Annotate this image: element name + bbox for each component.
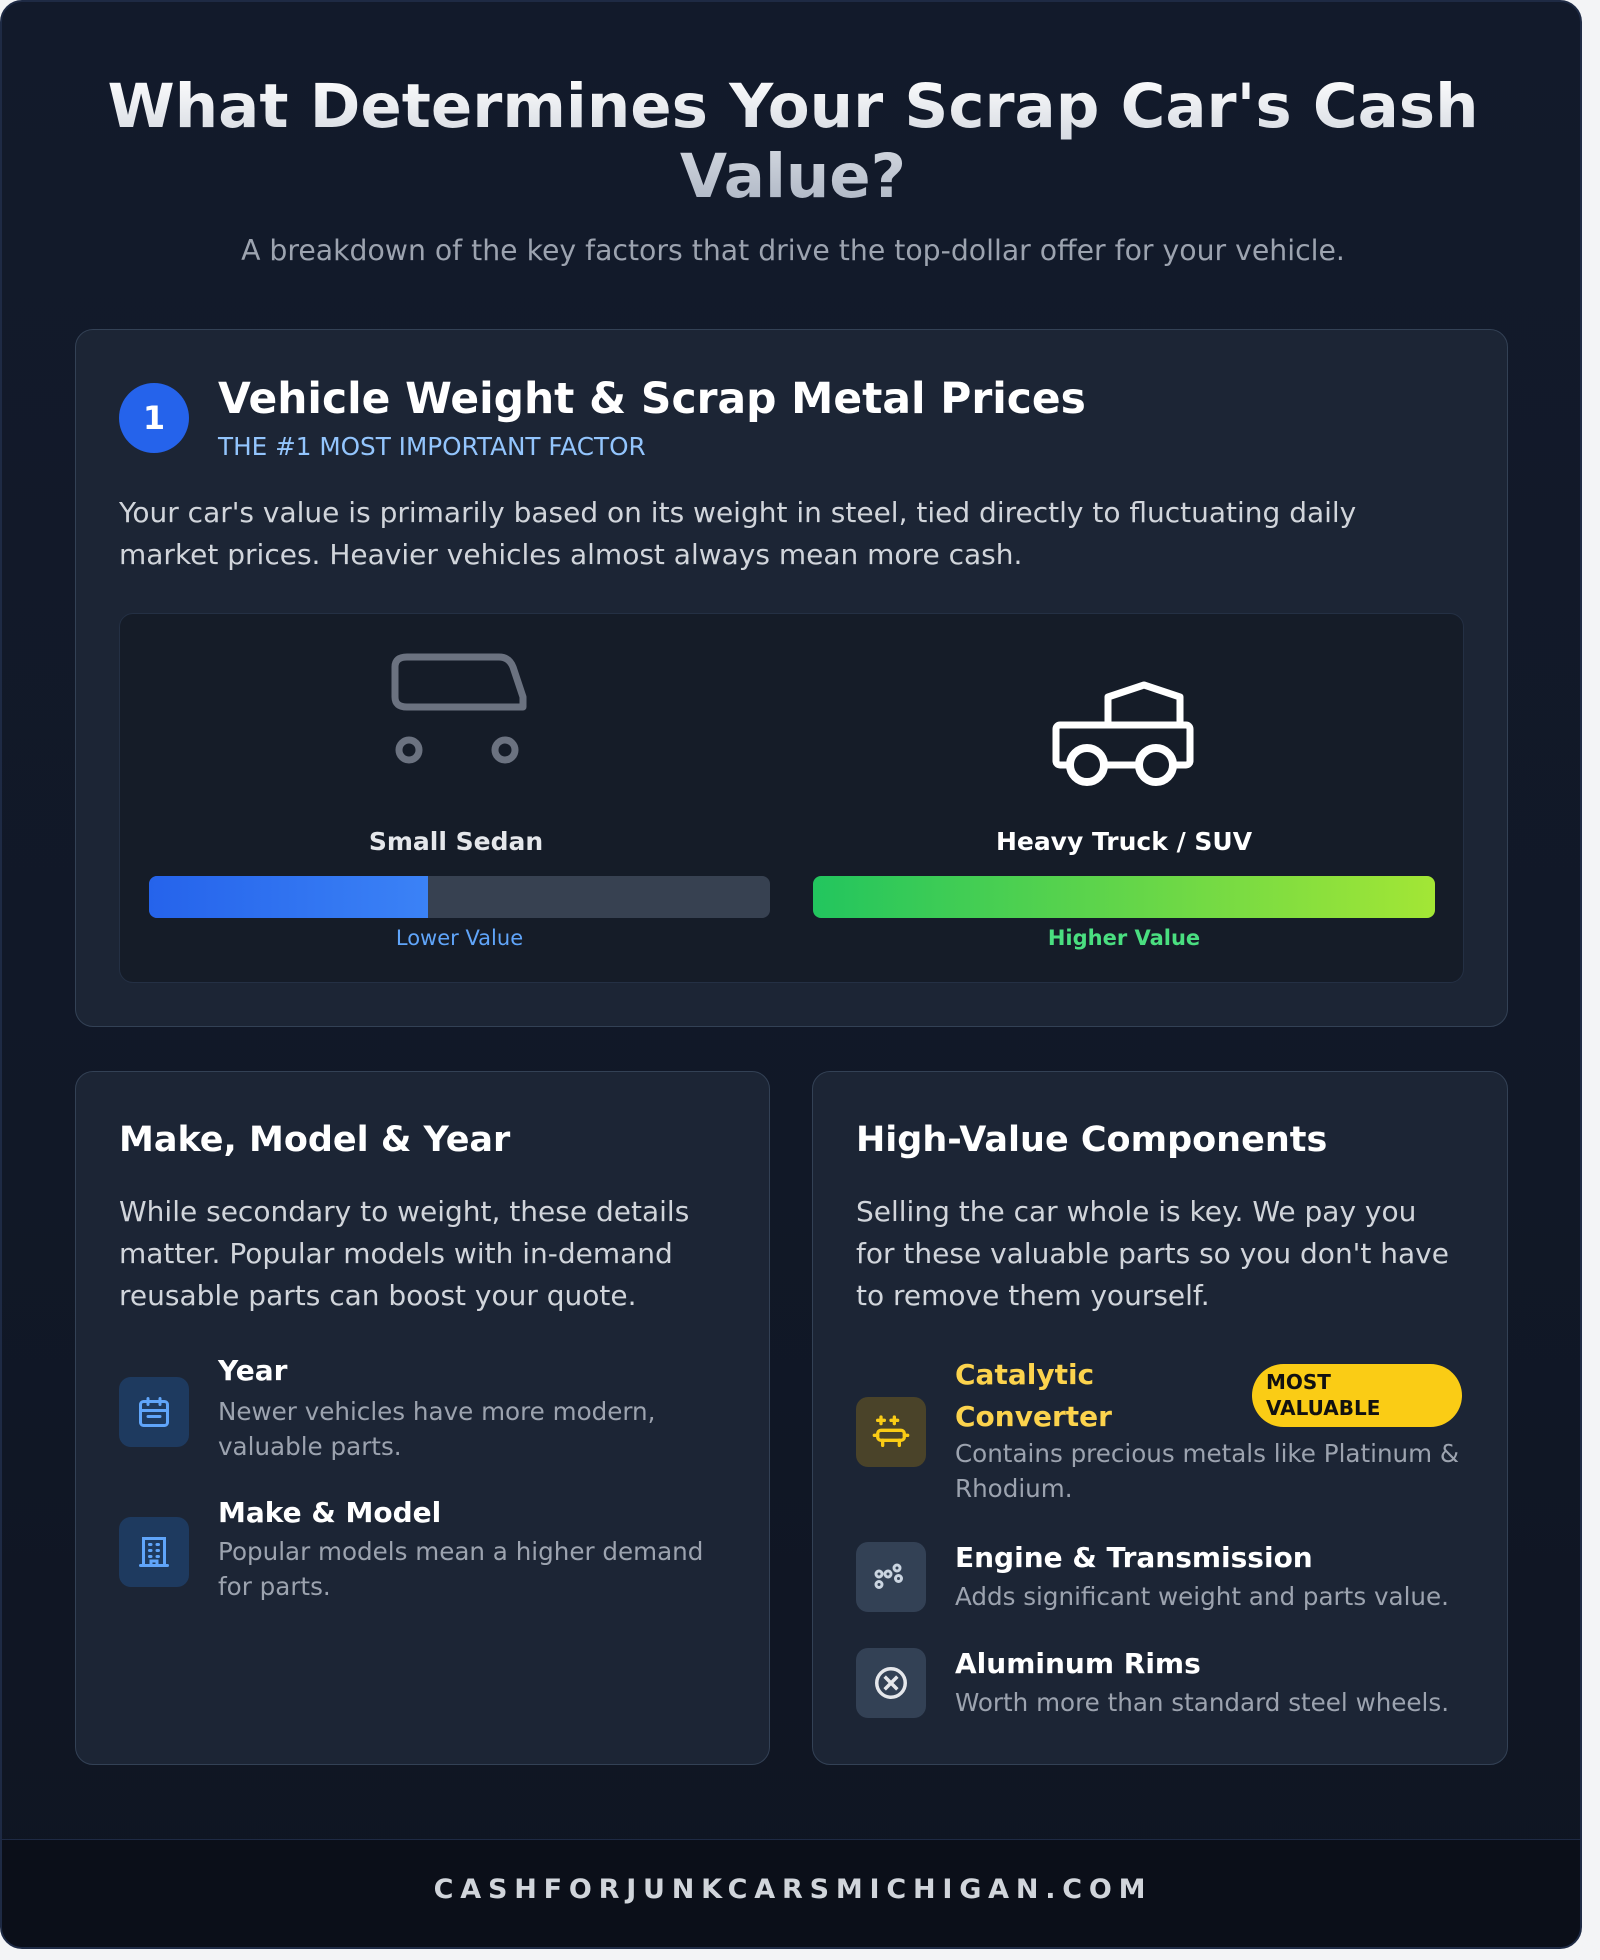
description: While secondary to weight, these details xyxy=(119,1195,689,1228)
heading: Make, Model & Year xyxy=(119,1120,510,1160)
badge number 1 xyxy=(119,383,189,453)
badge: most valuable: MOST xyxy=(1266,1370,1331,1394)
item: make & model: Make & Model xyxy=(218,1496,441,1529)
icon: heavy truck xyxy=(1052,682,1194,786)
description: market prices. Heavier vehicles almost always mean more cash. xyxy=(119,538,1022,571)
description: to remove them yourself. xyxy=(856,1279,1210,1312)
item: year: Year xyxy=(218,1354,287,1387)
label: small sedan: Small Sedan xyxy=(369,827,543,856)
icon: wheel xyxy=(856,1648,926,1718)
description: Your car's value is primarily based on its weight in steel, tied directly to fluctuating daily xyxy=(119,496,1356,529)
item: rims xyxy=(856,1647,1449,1718)
badge: most valuable: VALUABLE xyxy=(1266,1396,1380,1420)
description: reusable parts can boost your quote. xyxy=(119,1279,637,1312)
icon: small sedan xyxy=(392,654,526,764)
icon: converter xyxy=(856,1397,926,1467)
item: engine: Engine & Transmission xyxy=(955,1541,1313,1574)
item: rims: Worth more than standard steel wheels. xyxy=(955,1688,1449,1717)
description: for these valuable parts so you don't have xyxy=(856,1237,1449,1270)
item: catalytic converter xyxy=(856,1358,1462,1503)
description: matter. Popular models with in-demand xyxy=(119,1237,673,1270)
item: make & model: for parts. xyxy=(218,1572,331,1601)
item: engine: Adds significant weight and parts value. xyxy=(955,1582,1449,1611)
subheading: THE #1 MOST IMPORTANT FACTOR xyxy=(218,432,646,461)
icon: building xyxy=(119,1517,189,1587)
bar: higher value xyxy=(813,876,1435,918)
item: catalytic converter: Rhodium. xyxy=(955,1474,1073,1503)
item: year: Newer vehicles have more modern, xyxy=(218,1397,655,1426)
item: catalytic converter: Contains precious metals like Platinum & xyxy=(955,1439,1459,1468)
label: lower value: Lower Value xyxy=(396,926,523,950)
description xyxy=(119,496,1356,571)
bar: lower value xyxy=(149,876,770,918)
panel: vehicle weight xyxy=(75,329,1508,1027)
item: catalytic converter: Converter xyxy=(955,1400,1112,1433)
heading: High-Value Components xyxy=(856,1120,1327,1160)
comparison box xyxy=(119,613,1464,983)
item: make & model xyxy=(119,1496,703,1601)
item: engine xyxy=(856,1541,1449,1612)
badge number 1: 1 xyxy=(143,399,165,437)
item: rims: Aluminum Rims xyxy=(955,1647,1201,1680)
label: higher value: Higher Value xyxy=(1048,926,1200,950)
item: make & model: Popular models mean a higher demand xyxy=(218,1537,703,1566)
footer text: CASHFORJUNKCARSMICHIGAN.COM xyxy=(434,1874,1152,1905)
description xyxy=(856,1195,1449,1312)
item: year xyxy=(119,1354,655,1461)
title: Value? xyxy=(680,141,906,212)
icon: engine xyxy=(856,1542,926,1612)
panel: high-value components xyxy=(812,1071,1508,1765)
title xyxy=(2,72,1584,212)
item: catalytic converter: Catalytic xyxy=(955,1358,1094,1391)
heading: Vehicle Weight & Scrap Metal Prices xyxy=(218,374,1086,423)
footer xyxy=(2,1839,1584,1951)
icon: calendar xyxy=(119,1377,189,1447)
title: What Determines Your Scrap Car's Cash xyxy=(107,71,1479,142)
description xyxy=(119,1195,689,1312)
badge: most valuable xyxy=(1252,1364,1462,1427)
description: Selling the car whole is key. We pay you xyxy=(856,1195,1416,1228)
subtitle: A breakdown of the key factors that drive the top-dollar offer for your vehicle. xyxy=(241,234,1345,267)
panel: make model year xyxy=(75,1071,770,1765)
item: year: valuable parts. xyxy=(218,1432,402,1461)
label: heavy truck: Heavy Truck / SUV xyxy=(996,827,1252,856)
